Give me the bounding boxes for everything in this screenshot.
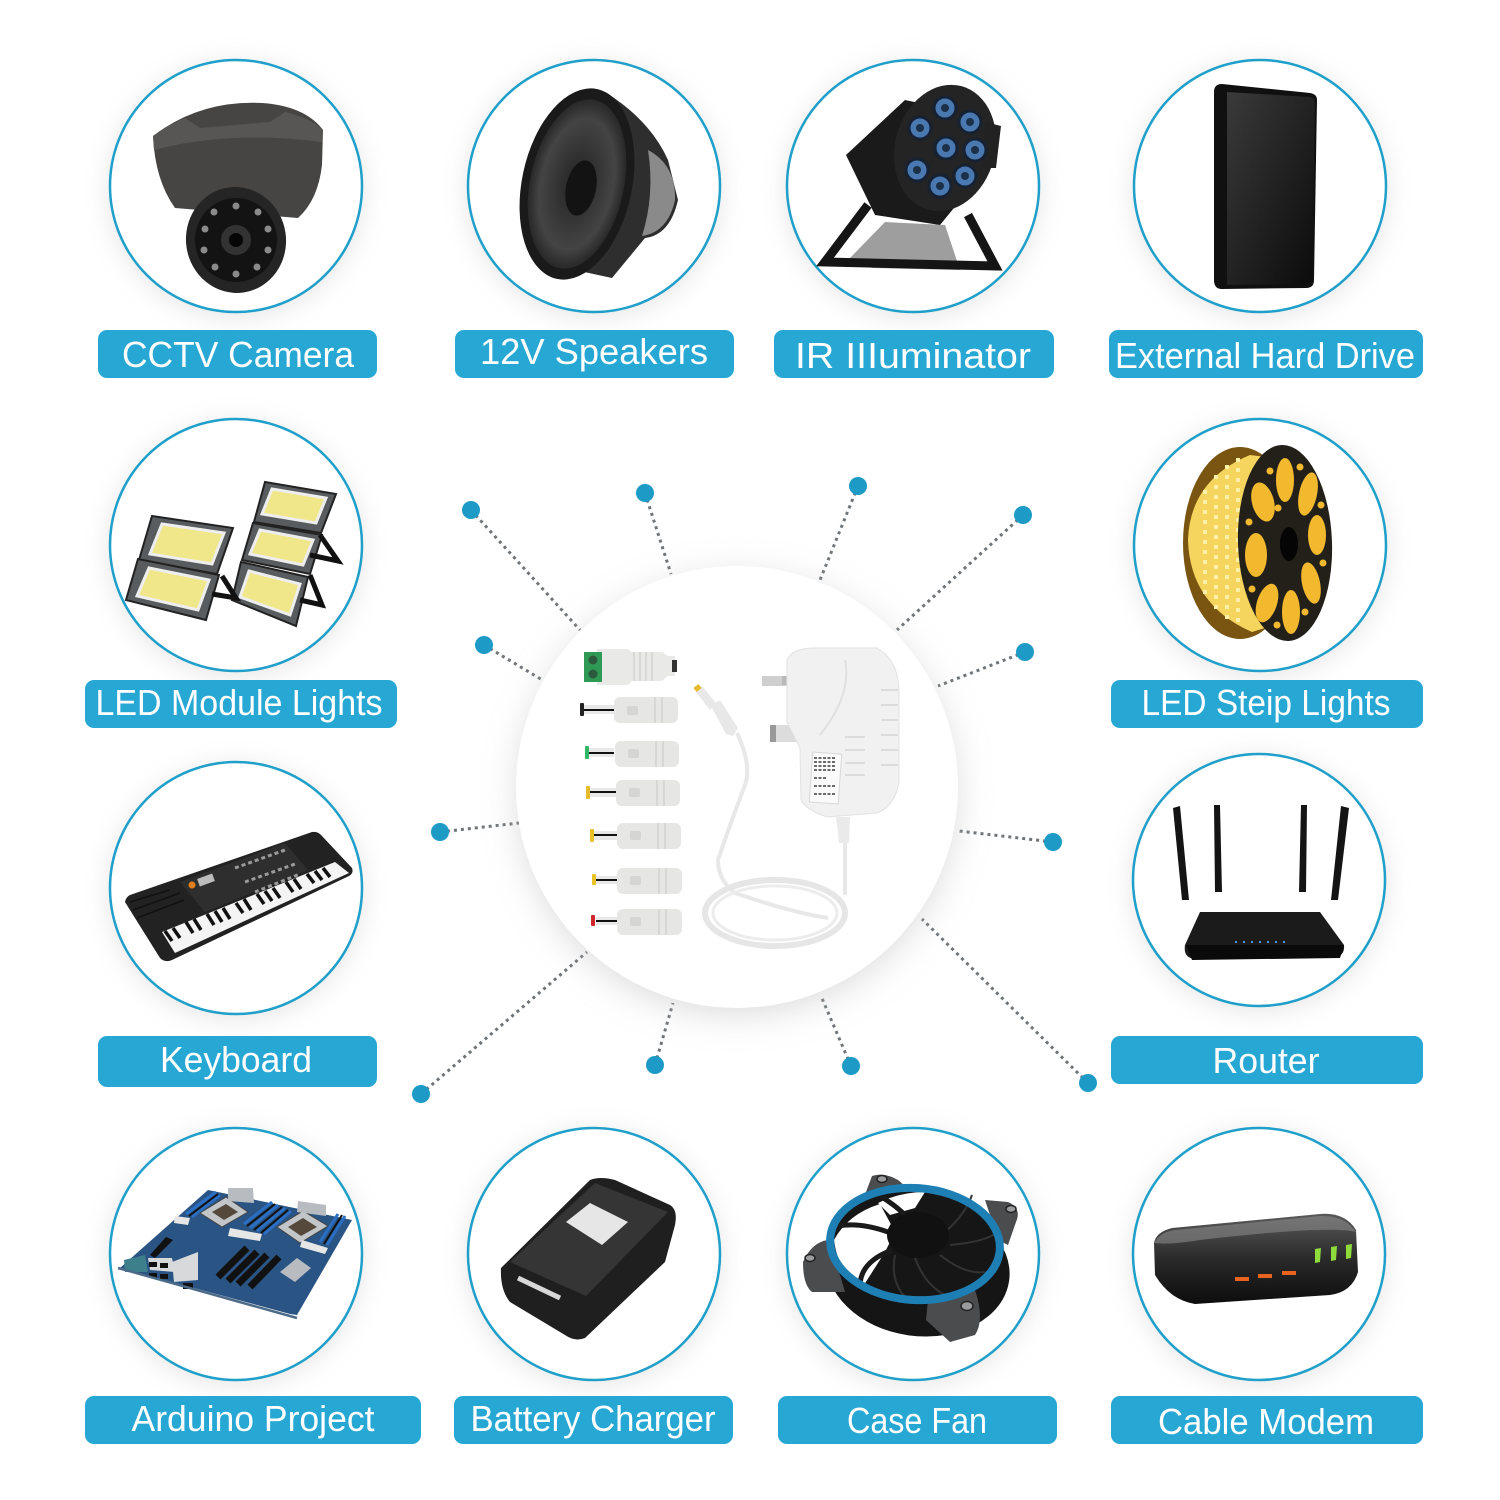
label: CCTV Camera: CCTV Camera bbox=[122, 334, 355, 375]
panel: case fan bbox=[787, 1128, 1039, 1380]
label: Keyboard: Keyboard bbox=[160, 1039, 312, 1080]
icon: fan bbox=[803, 1175, 1019, 1348]
panel: LED strip lights bbox=[1134, 419, 1386, 671]
icon: modem bbox=[1154, 1214, 1358, 1304]
panel: CCTV camera bbox=[110, 60, 362, 312]
panel: LED module lights bbox=[110, 419, 362, 671]
label: 12V Speakers: 12V Speakers bbox=[480, 331, 708, 372]
icon: charger bbox=[501, 1178, 676, 1339]
icon: motherboard bbox=[118, 1188, 352, 1318]
label: Router: Router bbox=[1212, 1040, 1320, 1081]
label: Cable Modem: Cable Modem bbox=[1158, 1401, 1374, 1442]
label: Case Fan bbox=[778, 1396, 1057, 1444]
panel: centre product circle bbox=[516, 566, 958, 1013]
icon: dome camera bbox=[153, 103, 323, 299]
icon: screw terminal adapter bbox=[584, 649, 677, 685]
icon: LED strip reel bbox=[1183, 443, 1335, 643]
label: 12V Speakers bbox=[455, 330, 734, 378]
label: Case Fan: Case Fan bbox=[847, 1400, 987, 1441]
icon: flood lights bbox=[126, 482, 338, 626]
panel: router bbox=[1133, 754, 1385, 1006]
connector lines and dots bbox=[412, 477, 1097, 1103]
label: Cable Modem bbox=[1111, 1396, 1423, 1444]
panel: Arduino project bbox=[110, 1128, 362, 1380]
label: Keyboard bbox=[98, 1036, 377, 1087]
icon: power adapter with cable bbox=[695, 648, 899, 946]
label: IR Illuminator bbox=[774, 330, 1054, 378]
panel: IR illuminator bbox=[787, 60, 1039, 312]
panel: 12V speakers bbox=[468, 60, 720, 312]
icon: electronic keyboard bbox=[125, 832, 353, 961]
icon: speaker bbox=[503, 78, 678, 290]
label: LED Steip Lights: LED Steip Lights bbox=[1142, 682, 1390, 723]
label: IR Illuminator: IR IIIuminator bbox=[795, 335, 1031, 376]
icon: DC tip adapters bbox=[580, 697, 682, 935]
label: External Hard Drive: External Hard Drive bbox=[1115, 335, 1415, 376]
label: LED Module Lights: LED Module Lights bbox=[96, 682, 382, 723]
panel: cable modem bbox=[1133, 1128, 1385, 1380]
icon: router bbox=[1173, 805, 1349, 960]
icon: hard drive bbox=[1214, 84, 1317, 289]
label: Arduino Project bbox=[85, 1396, 421, 1444]
label: Battery Charger: Battery Charger bbox=[470, 1398, 716, 1439]
panel: battery charger bbox=[468, 1128, 720, 1380]
label: Arduino Project: Arduino Project bbox=[132, 1398, 374, 1439]
panel: external hard drive bbox=[1134, 60, 1386, 312]
icon: par light bbox=[825, 73, 1010, 270]
panel: keyboard bbox=[110, 762, 362, 1014]
label: Router bbox=[1111, 1036, 1423, 1084]
